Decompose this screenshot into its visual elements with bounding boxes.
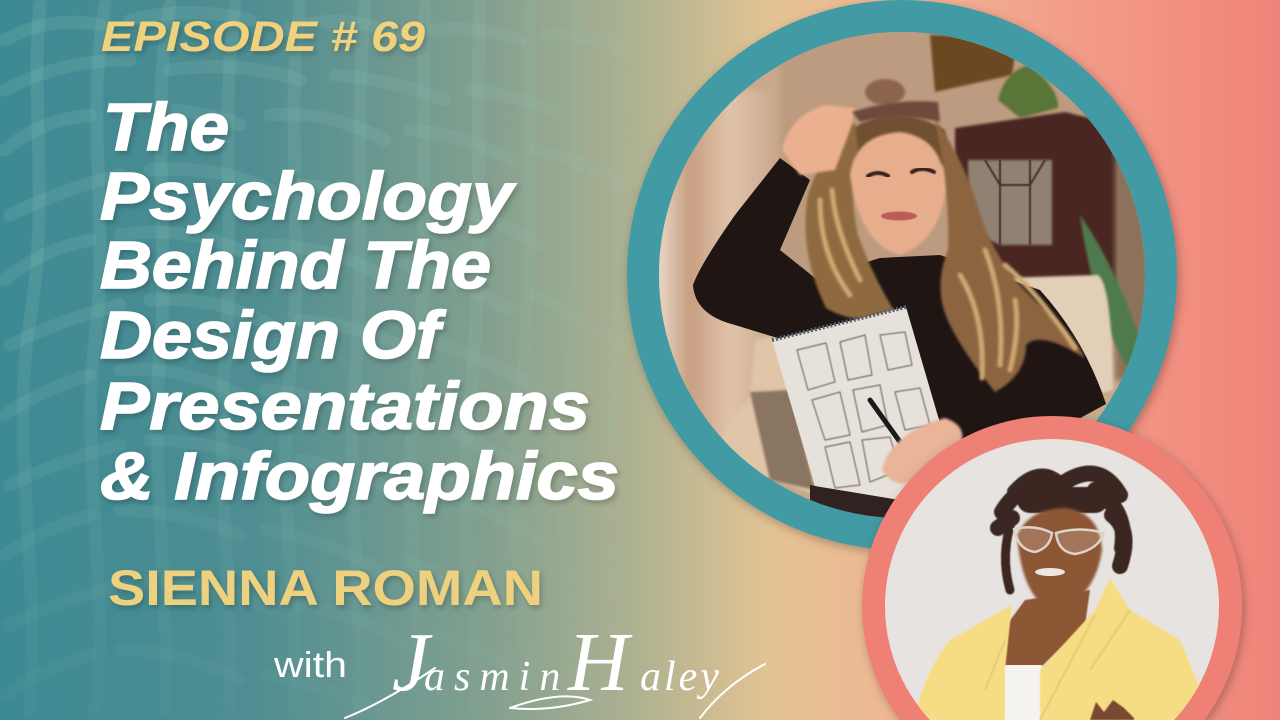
glasses	[1014, 527, 1104, 554]
chair arm	[722, 336, 815, 494]
title	[100, 90, 619, 514]
glass leading	[985, 160, 1045, 245]
spiral binding	[772, 307, 906, 340]
raised hand	[1090, 700, 1134, 720]
lips	[881, 212, 917, 220]
guest portrait photo	[650, 25, 1160, 525]
picture frame	[930, 35, 1018, 92]
chair back	[1012, 273, 1114, 394]
lap	[810, 485, 895, 518]
hair locs	[998, 474, 1124, 590]
smile	[1035, 568, 1065, 576]
title: Psychology	[100, 159, 517, 234]
cabinet	[955, 112, 1118, 285]
title: Behind The	[100, 228, 491, 303]
right hair lock	[935, 120, 1085, 392]
pen	[870, 400, 900, 442]
host credit	[273, 616, 765, 718]
guest name: SIENNA ROMAN	[108, 560, 543, 616]
left hair lock	[805, 122, 895, 319]
host credit: asmin	[424, 654, 569, 700]
host portrait photo	[885, 439, 1219, 720]
raised hand	[782, 105, 855, 175]
plant leaf	[1080, 215, 1140, 380]
face	[1017, 508, 1102, 612]
host credit: with	[273, 644, 347, 685]
woven texture	[0, 0, 534, 686]
title: Design Of	[100, 298, 446, 373]
white top	[1004, 665, 1042, 720]
pillow	[750, 390, 815, 490]
hair crown	[854, 116, 948, 166]
notebook	[772, 307, 942, 500]
eyes	[868, 169, 934, 176]
title: Presentations	[100, 369, 590, 444]
plant	[998, 65, 1058, 118]
curtain	[655, 90, 780, 520]
yellow jacket	[914, 578, 1205, 720]
right wall	[1112, 153, 1145, 383]
lower hand	[882, 418, 962, 483]
neck and chest	[1003, 590, 1090, 668]
cabinet glass	[968, 160, 1052, 245]
sketches	[797, 332, 930, 488]
host credit: H	[567, 616, 633, 709]
vase	[865, 79, 905, 105]
face	[850, 132, 945, 255]
hair highlights	[820, 190, 1075, 378]
title: & Infographics	[100, 439, 619, 514]
wall	[780, 30, 1150, 290]
glasses on head	[852, 101, 940, 122]
episode label: EPISODE # 69	[101, 13, 425, 61]
sweater	[693, 158, 1106, 450]
host credit: J	[392, 616, 433, 709]
host credit: aley	[640, 654, 722, 700]
lapel shading	[985, 610, 1130, 720]
guest portrait frame	[627, 0, 1177, 550]
title: The	[103, 90, 229, 165]
host portrait frame	[862, 416, 1242, 720]
